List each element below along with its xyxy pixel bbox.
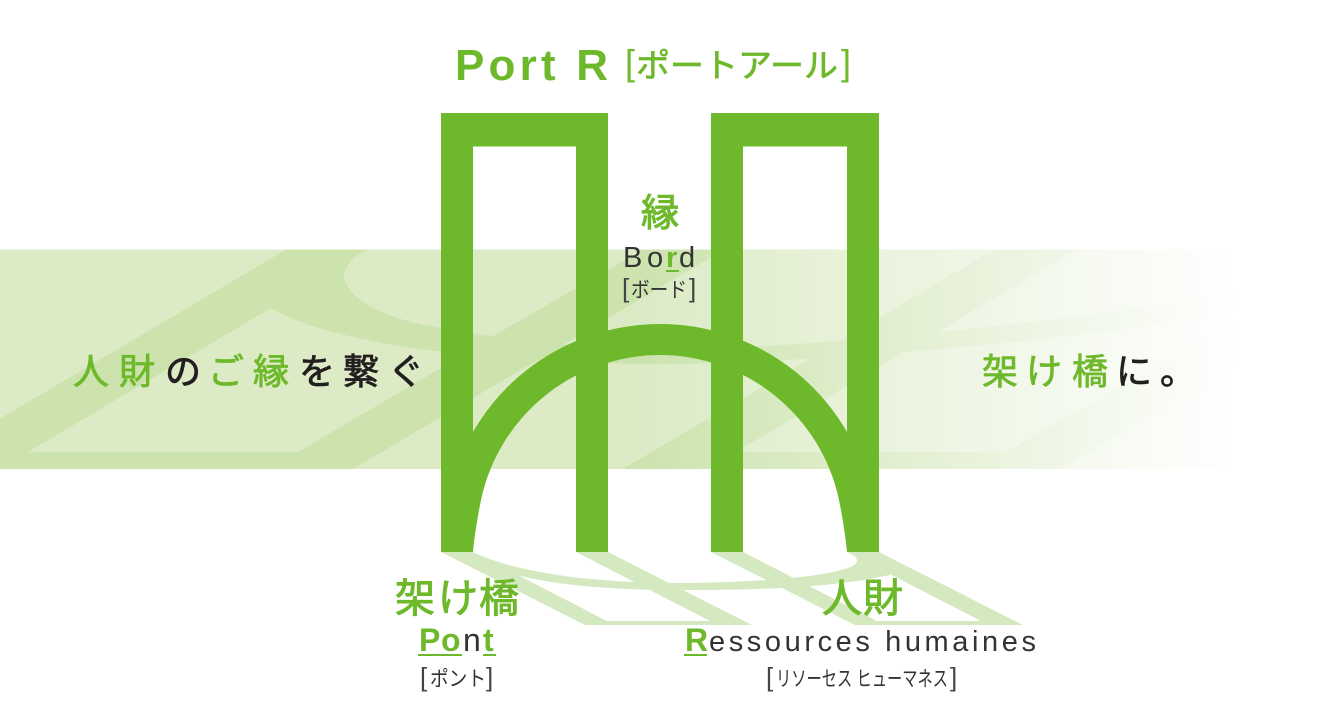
- label: Pont: ]: [486, 662, 493, 692]
- title: Port R: Port R: [455, 41, 608, 90]
- label: Ressources humaines: リソーセス ヒューマネス: [776, 668, 948, 691]
- title: Port R: ポートアール: [636, 47, 838, 84]
- ground shadow of bridge: [441, 552, 1023, 625]
- right tagline: 架け橋に。: [982, 351, 1196, 392]
- label: Bord: 縁: [641, 193, 679, 235]
- label: Bord: [622, 193, 696, 303]
- title: Port R: ]: [841, 42, 851, 83]
- left tagline: 人財 のご縁 を繋ぐ: [73, 351, 424, 392]
- label: Ressources humaines: 人財: [822, 577, 903, 621]
- label: Pont: Pont: [419, 622, 494, 658]
- label: Bord: ボード: [631, 279, 687, 302]
- title: Port R: [455, 41, 851, 90]
- label: Pont: [: [420, 662, 428, 692]
- panel: background band with bridge shadow: [0, 250, 1180, 469]
- label: Pont: 架け橋: [395, 577, 519, 621]
- label: Ressources humaines: essources humaines: [709, 626, 1036, 658]
- label: Ressources humaines: [684, 577, 1036, 692]
- label: Bord: Bord: [623, 242, 695, 274]
- title: Port R: [: [625, 42, 635, 83]
- label: Ressources humaines: ]: [950, 662, 957, 692]
- label: Pont: ポント: [430, 668, 486, 691]
- label: Pont: [395, 577, 519, 692]
- label: Bord: ]: [689, 273, 696, 303]
- logo: green bridge H shape: [441, 113, 879, 552]
- label: Ressources humaines: R: [685, 622, 708, 658]
- label: Bord: [: [622, 273, 630, 303]
- label: Ressources humaines: [: [766, 662, 774, 692]
